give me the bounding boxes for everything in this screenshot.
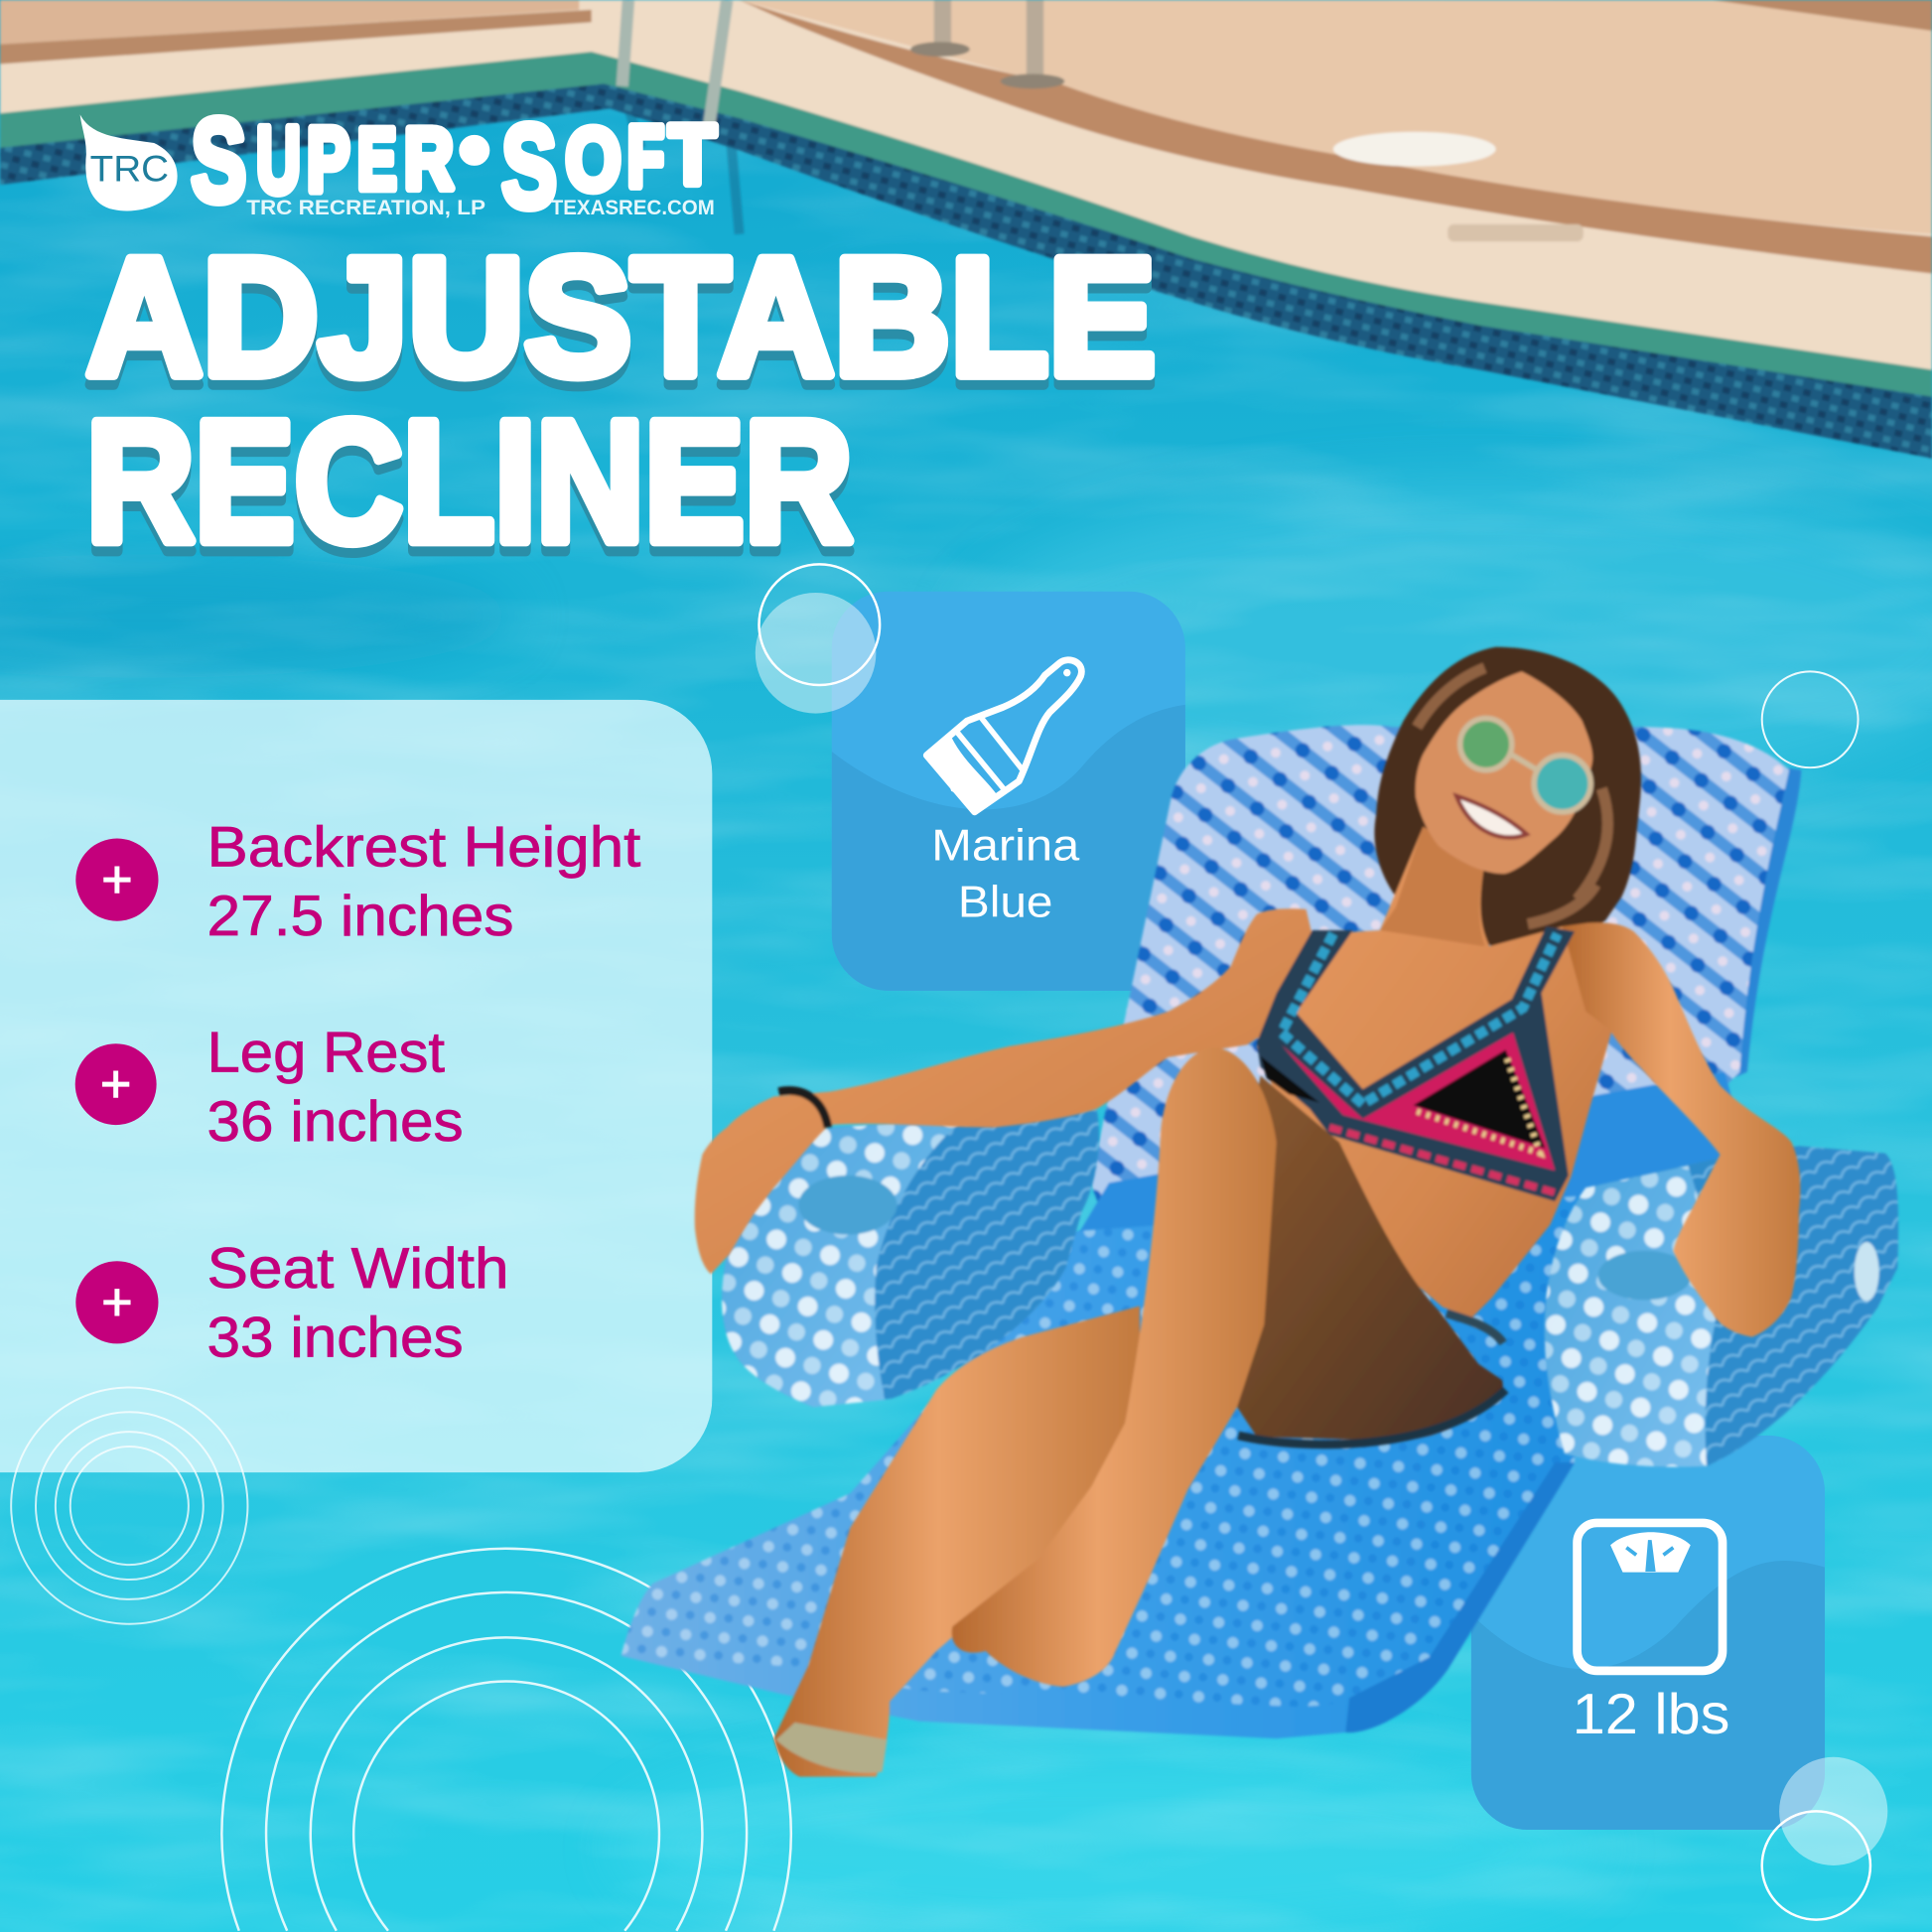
neck and face (1380, 827, 1484, 946)
spec: backrest height (75, 815, 640, 948)
spec: backrest height: Backrest Height (207, 815, 640, 879)
label: Marina Blue: Blue (958, 878, 1052, 926)
wordmark: Super Soft (191, 94, 716, 232)
label: 12 lbs: 12 lbs (1573, 1683, 1729, 1746)
smile (1456, 796, 1527, 837)
wordmark: Super Soft: R (404, 111, 454, 207)
company name: TRC RECREATION, LP (246, 197, 485, 219)
title: Adjustable Recliner: ADJUSTABLE (86, 222, 1156, 410)
card: weight (1471, 1436, 1825, 1836)
title: Adjustable Recliner (86, 222, 1156, 588)
icon: TRC droplet badge: TRC (90, 147, 169, 189)
wordmark: Super Soft: S (191, 94, 246, 226)
label: Marina Blue (931, 821, 1079, 926)
card: color (832, 592, 1185, 998)
icon: paint brush (926, 660, 1081, 812)
dark thigh (1232, 1075, 1503, 1441)
icon: TRC droplet badge (80, 114, 178, 210)
pool deck and tile edge (0, 0, 1932, 459)
float: left armrest (722, 1109, 1099, 1407)
wordmark: Super Soft: P (307, 109, 349, 210)
decorative rings: bottom (221, 1549, 791, 1931)
wordmark: Super Soft: O (566, 109, 621, 208)
icon: bathroom scale (1578, 1523, 1723, 1671)
bubble: bottom right (1762, 1757, 1887, 1920)
bikini top (1257, 926, 1575, 1201)
spec: leg rest (75, 1022, 464, 1154)
wristband (778, 1091, 828, 1128)
logo: TRC Super-Soft (80, 94, 716, 232)
decorative rings: left (11, 1387, 247, 1624)
raised leg and foot (952, 1047, 1277, 1687)
spec: leg rest: 36 inches (207, 1090, 464, 1154)
wordmark: Super Soft: F (627, 108, 664, 205)
float: right armrest (1545, 1146, 1898, 1467)
bikini bottom (1447, 1313, 1503, 1343)
spec: seat width (75, 1237, 509, 1369)
wordmark: Super Soft: S (501, 100, 557, 232)
float: backrest (1072, 725, 1801, 1257)
panel: dimensions (0, 700, 712, 1472)
wordmark: Super Soft: U (256, 108, 301, 212)
left arm (695, 908, 1318, 1274)
torso and chest (1257, 827, 1614, 1317)
title: Adjustable Recliner: RECLINER (86, 385, 853, 578)
label: Marina Blue: Marina (931, 821, 1079, 870)
product photo: float with woman (621, 647, 1898, 1777)
lower leg and foot (773, 1307, 1140, 1777)
right arm (1563, 922, 1800, 1337)
website: TEXASREC.COM (551, 197, 715, 219)
spec: seat width: Seat Width (207, 1237, 509, 1301)
title: Adjustable Recliner: RECLINER (86, 395, 853, 588)
wordmark: Super Soft: E (357, 111, 397, 207)
hair (1374, 647, 1641, 950)
spec: backrest height: 27.5 inches (207, 885, 514, 948)
title: Adjustable Recliner: ADJUSTABLE (86, 232, 1156, 420)
woman (695, 647, 1800, 1777)
spec: seat width: 33 inches (207, 1306, 464, 1369)
wordmark: Super Soft: T (669, 108, 716, 202)
card content: weight (1573, 1523, 1729, 1746)
spec: leg rest: Leg Rest (207, 1022, 445, 1085)
bubble: top of color card (756, 564, 880, 714)
ring: upper right (1762, 671, 1859, 767)
float: leg mat (621, 1195, 1589, 1738)
sunglasses (1460, 719, 1590, 812)
